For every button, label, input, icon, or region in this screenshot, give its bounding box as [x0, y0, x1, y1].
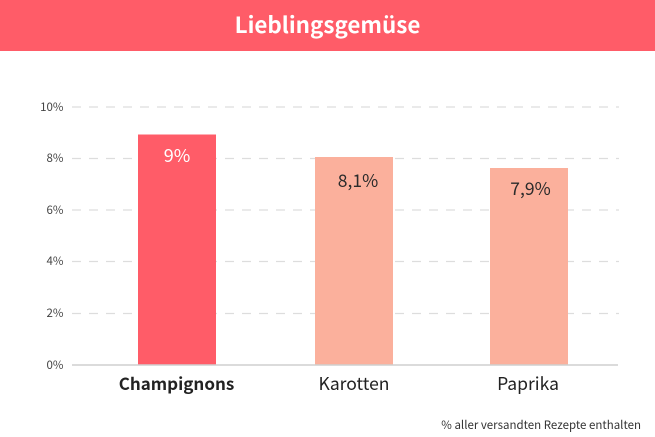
y axis labels: 2%	[47, 305, 64, 321]
bar: Karotten: 8,1%	[338, 168, 378, 193]
bar: Paprika	[490, 168, 568, 365]
bar chart	[40, 99, 619, 396]
x axis labels: Karotten	[319, 371, 389, 396]
title banner	[0, 0, 655, 51]
bar: Karotten	[315, 157, 393, 365]
y axis labels: 10%	[40, 99, 64, 115]
x axis labels	[119, 370, 559, 396]
y axis labels: 6%	[47, 202, 64, 218]
bar: Champignons: 9%	[164, 142, 190, 168]
y axis labels: 0%	[47, 357, 64, 373]
bar: Paprika: 7,9%	[510, 176, 551, 201]
x axis labels: Paprika	[497, 371, 559, 396]
x axis line	[72, 364, 618, 366]
x axis labels: Champignons	[119, 370, 234, 395]
bar: Champignons	[138, 134, 216, 365]
y axis labels: 4%	[47, 253, 64, 269]
y axis labels	[40, 99, 64, 373]
footnote: % aller versandten Rezepte enthalten	[441, 417, 641, 433]
y axis labels: 8%	[47, 150, 64, 166]
title banner: Lieblingsgemüse	[235, 8, 420, 40]
